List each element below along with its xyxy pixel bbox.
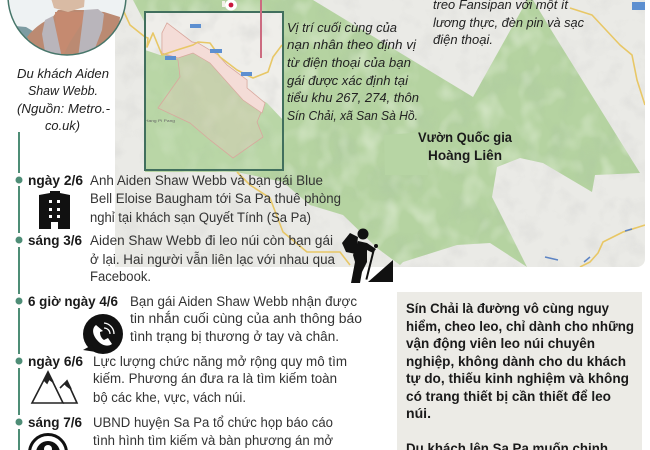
- timeline event: 6/6: bộ các khe, vực, vách núi.: [93, 390, 246, 405]
- timeline event: 4/6: tin nhắn cuối cùng của anh thông báo: [130, 311, 362, 326]
- timeline event: 2/6: Bell Eloise Baugham tới Sa Pa thuê phòng: [90, 191, 341, 206]
- inset roads: [145, 33, 282, 78]
- top caption: Fansipan supplies: lương thực, đèn pin và sạc: [433, 15, 584, 30]
- place label: Hang Pi Pang: [145, 118, 175, 123]
- national park green area: [115, 0, 645, 267]
- timeline event: 3/6: Aiden Shaw Webb đi leo núi còn bạn gái: [90, 233, 333, 248]
- portrait caption: co.uk): [45, 118, 80, 133]
- park name label: Vườn Quốc gia: [418, 130, 512, 145]
- icon: location target: [30, 434, 66, 450]
- icon: mountains: [32, 372, 77, 403]
- timeline event: 4/6: Bạn gái Aiden Shaw Webb nhận được: [130, 294, 357, 309]
- park name label: [418, 130, 512, 163]
- icon: hotel building: [39, 191, 70, 229]
- top caption: Fansipan supplies: điện thoại.: [433, 32, 493, 47]
- timeline event: 6/6: Lực lượng chức năng mở rộng quy mô tìm: [93, 354, 347, 369]
- icon: hiker: [342, 228, 393, 283]
- portrait caption: [17, 66, 111, 133]
- timeline axis: [16, 132, 22, 450]
- commune boundary: [158, 23, 265, 158]
- panel: warning note: hiểm, cheo leo, chỉ dành cho những: [406, 319, 634, 334]
- road signs: [165, 24, 252, 76]
- roads: [124, 8, 645, 267]
- map caption: last known location: nạn nhân theo định vị: [287, 37, 417, 52]
- portrait caption: Shaw Webb.: [28, 83, 98, 98]
- panel: warning note: Sín Chải là đường vô cùng nguy: [406, 301, 609, 316]
- panel: warning note: [397, 292, 642, 450]
- map caption: last known location: [287, 20, 419, 123]
- timeline event: 2/6: nghỉ tại khách sạn Quyết Tính (Sa Pa): [90, 210, 311, 225]
- timeline event: 3/6: sáng 3/6: [28, 233, 82, 248]
- timeline event: 7/6: [28, 415, 333, 450]
- red pointer line: [260, 0, 262, 58]
- icon: phone speech bubble: [83, 314, 123, 354]
- map caption: last known location: từ điện thoại của bạn: [287, 55, 411, 70]
- map caption: last known location: Sín Chải, xã San Sà Hồ.: [287, 108, 418, 123]
- map background: [115, 0, 645, 267]
- map caption: last known location: gái được xác định tại: [287, 73, 409, 88]
- timeline event: 7/6: UBND huyện Sa Pa tổ chức họp báo cáo: [93, 415, 333, 430]
- portrait caption: (Nguồn: Metro.-: [17, 101, 111, 116]
- panel: warning note: có trang thiết bị cần thiết để leo: [406, 389, 611, 404]
- timeline event: 3/6: [28, 228, 393, 284]
- timeline event: 7/6: sáng 7/6: [28, 415, 82, 430]
- panel: warning note: nghiệp, không dành cho du khách: [406, 354, 626, 369]
- timeline event: 3/6: ở lại. Hai người vẫn liên lạc với nhau qua: [90, 252, 335, 267]
- park name label: Hoàng Liên: [428, 148, 502, 163]
- top caption: Fansipan supplies: [433, 0, 584, 47]
- timeline event: 2/6: [28, 173, 341, 229]
- timeline event: 6/6: ngày 6/6: [28, 354, 83, 369]
- panel: warning note: vận động viên leo núi chuyên: [406, 336, 595, 351]
- timeline event: 7/6: tình hình tìm kiếm và bàn phương án mở: [93, 433, 333, 448]
- location marker: [222, 0, 237, 10]
- timeline event: 2/6: Anh Aiden Shaw Webb và bạn gái Blue: [90, 173, 323, 188]
- timeline event: 2/6: ngày 2/6: [28, 173, 83, 188]
- map caption: last known location: tiểu khu 267, 274, thôn: [287, 90, 419, 105]
- timeline event: 4/6: [28, 294, 362, 354]
- timeline event: 6/6: [28, 354, 347, 405]
- panel: warning note: tự do, thiếu kinh nghiệm và không: [406, 371, 629, 386]
- inset map: [145, 12, 283, 170]
- timeline event: 3/6: Facebook.: [90, 269, 151, 284]
- portrait caption: Du khách Aiden: [17, 66, 109, 81]
- panel: warning note: núi.: [406, 406, 431, 421]
- portrait photo: [7, 0, 127, 56]
- timeline event: 4/6: 6 giờ ngày 4/6: [28, 294, 118, 309]
- timeline event: 4/6: tình trạng bị thương ở tay và chân.: [130, 329, 339, 344]
- map caption: last known location: Vị trí cuối cùng của: [287, 20, 397, 35]
- timeline event: 6/6: kiếm. Phương án đưa ra là tìm kiếm toàn: [93, 371, 337, 386]
